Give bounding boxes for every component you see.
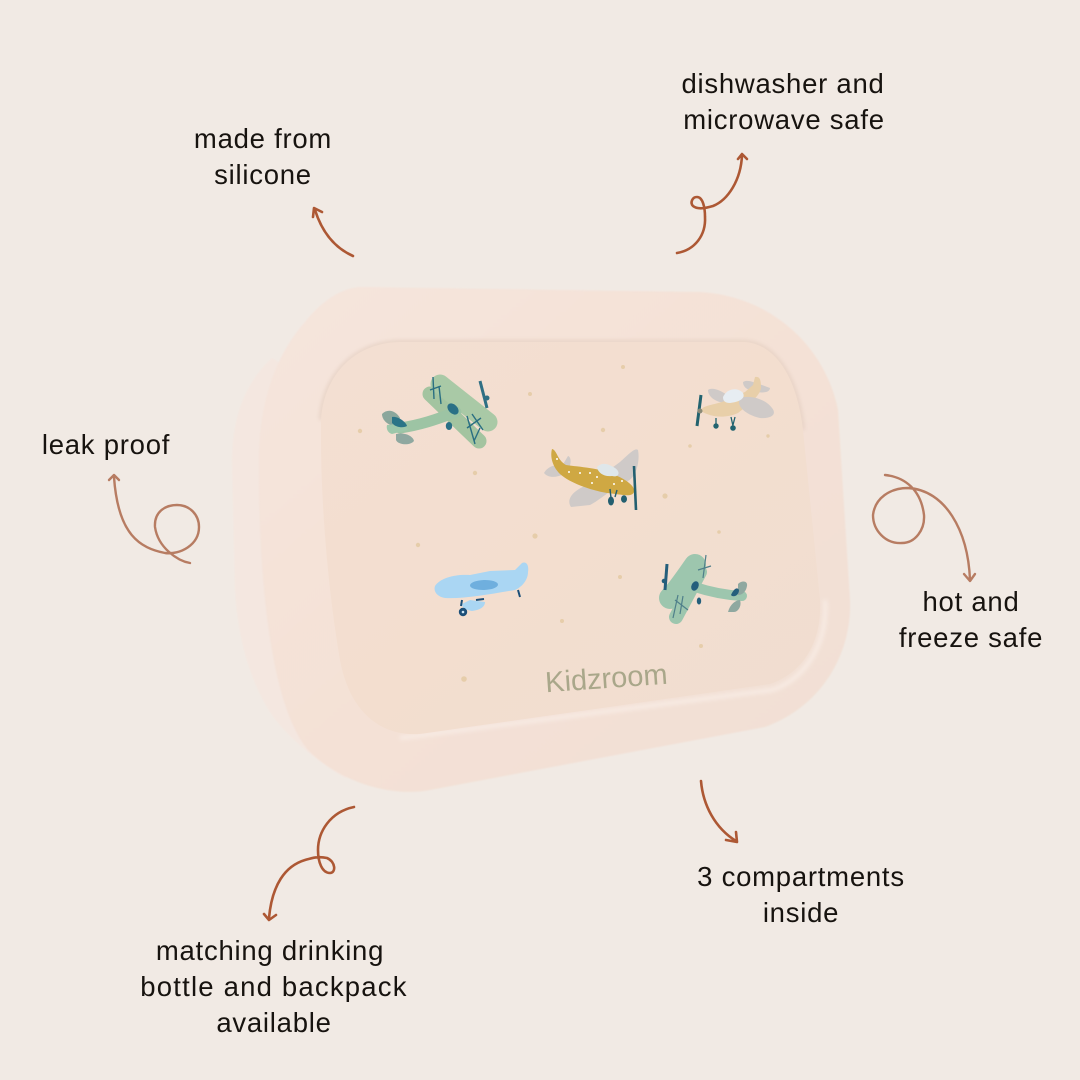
box body	[232, 358, 420, 778]
label: dishwasher and microwave safe	[681, 68, 885, 135]
label: 3 compartments inside: inside	[763, 897, 839, 928]
lid inner panel	[321, 342, 820, 734]
plane: yellow plane centre	[544, 449, 639, 510]
label: 3 compartments inside	[697, 861, 905, 928]
arrow: to matching products label	[264, 807, 354, 920]
plane: green biplane lower right	[662, 555, 747, 618]
label: made from silicone: silicone	[214, 159, 312, 190]
arrow: to dishwasher label	[677, 154, 747, 253]
label: matching drinking bottle and backpack available: matching drinking	[156, 935, 384, 966]
plane: tan plane top right	[697, 377, 774, 431]
arrow: to leak proof label	[109, 475, 199, 563]
label: dishwasher and microwave safe: microwave safe	[683, 104, 885, 135]
label: hot and freeze safe: freeze safe	[899, 622, 1043, 653]
arrow: to 3 compartments label	[701, 781, 737, 842]
label: matching drinking bottle and backpack available	[140, 935, 408, 1038]
lunch box product	[232, 287, 850, 792]
lid inner panel groove	[321, 342, 803, 430]
arrow: to hot and freeze label	[873, 475, 975, 581]
label: hot and freeze safe	[899, 586, 1043, 653]
label: leak proof: leak proof	[42, 429, 170, 460]
label: hot and freeze safe: hot and	[922, 586, 1020, 617]
plane: green biplane top left	[382, 377, 490, 444]
label: made from silicone	[194, 123, 332, 190]
label: dishwasher and microwave safe: dishwasher and	[681, 68, 885, 99]
label: matching drinking bottle and backpack available: bottle and backpack	[140, 971, 408, 1002]
arrow: to silicone label	[313, 208, 353, 256]
lid lower highlight	[400, 600, 825, 738]
label: matching drinking bottle and backpack available: available	[216, 1007, 332, 1038]
confetti dots	[358, 365, 770, 682]
label: made from silicone: made from	[194, 123, 332, 154]
plane: blue plane lower left	[435, 563, 528, 616]
label: 3 compartments inside: 3 compartments	[697, 861, 905, 892]
box lid	[259, 287, 850, 792]
brand name: Kidzroom	[544, 659, 669, 699]
